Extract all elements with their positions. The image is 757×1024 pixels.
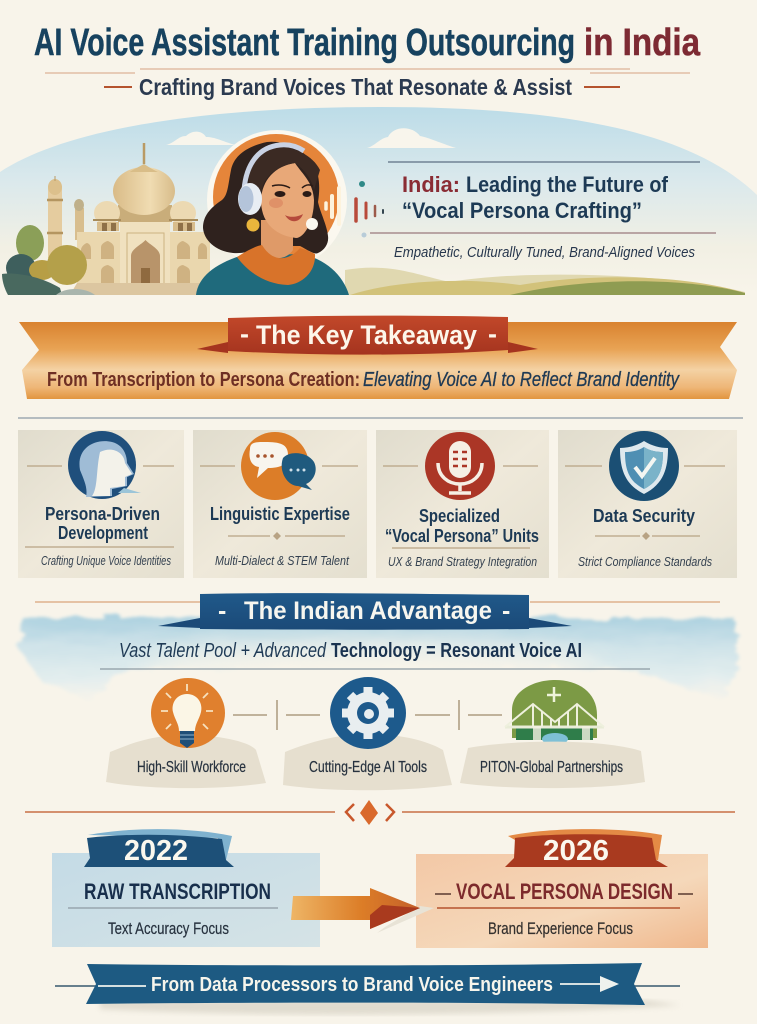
box heading: RAW TRANSCRIPTION: [84, 879, 271, 904]
panel: hero scene: [0, 107, 757, 295]
headset: [244, 145, 304, 190]
facial features: [269, 185, 313, 221]
arrow: 2022 to 2026: [291, 888, 434, 933]
heading: The Indian Advantage: [158, 593, 572, 630]
label: High-Skill Workforce: [137, 759, 246, 776]
icon: bridge: [505, 680, 604, 745]
panel: Persona-Driven Development: [18, 430, 184, 578]
clouds: [166, 128, 456, 148]
panel: key takeaway ribbon: [19, 316, 737, 399]
heading: The Key Takeaway: -: [240, 319, 249, 349]
heading: The Indian Advantage: -: [502, 597, 510, 625]
heading: The Key Takeaway: -: [488, 319, 497, 349]
label: PITON-Global Partnerships: [480, 759, 623, 776]
ribbon: 2022: 2022: [124, 835, 188, 867]
icon: chat bubbles: [241, 432, 316, 500]
icon: light bulb: [151, 678, 225, 748]
card title: Persona-Driven: [45, 504, 160, 524]
takeaway text: [47, 369, 680, 391]
earrings: [246, 218, 260, 232]
panel: Linguistic Expertise: [193, 430, 367, 578]
ribbon: 2026: 2026: [543, 835, 609, 867]
scarf: [237, 245, 315, 285]
panel: 2026 vocal persona design: [416, 829, 708, 948]
watercolor band: [20, 618, 738, 700]
panel: High-Skill Workforce: [106, 678, 266, 788]
hero text: [370, 162, 716, 261]
divider ornament: [25, 800, 735, 825]
icon: trees: [2, 225, 95, 295]
card caption: Multi-Dialect & STEM Talent: [215, 553, 350, 568]
hero text: Empathetic, Culturally Tuned, Brand-Aligned Voices: [394, 244, 695, 261]
box caption: Brand Experience Focus: [488, 919, 633, 938]
connectors: [233, 700, 502, 730]
subtitle: [45, 69, 690, 100]
hero text: India:: [402, 172, 460, 197]
card title: Development: [58, 523, 148, 543]
sound waves: [326, 188, 383, 224]
box heading: VOCAL PERSONA DESIGN: [456, 879, 673, 904]
body: [196, 254, 349, 295]
hero text: Leading the Future of: [466, 172, 669, 197]
takeaway text: From Transcription to Persona Creation:: [47, 369, 360, 391]
icon: shield: [609, 431, 679, 501]
icon: woman with headset: [196, 130, 383, 295]
ribbon: 2022: [84, 829, 234, 867]
panel: Specialized Vocal Persona Units: [376, 430, 549, 578]
title: in India: [584, 22, 701, 64]
title: AI Voice Assistant Training Outsourcing: [34, 22, 575, 64]
heading: The Indian Advantage: The Indian Advantage: [244, 597, 492, 625]
takeaway text: Elevating Voice AI to Reflect Brand Identity: [363, 369, 680, 391]
plaque: [106, 735, 266, 788]
heading: The Indian Advantage: -: [218, 597, 226, 625]
card title: [45, 504, 160, 543]
card caption: Strict Compliance Standards: [578, 554, 712, 569]
hero text: “Vocal Persona Crafting”: [402, 198, 642, 223]
equation text: Vast Talent Pool + Advanced: [119, 640, 327, 662]
ribbon: 2026: [505, 829, 668, 867]
panel: PITON-Global Partnerships: [460, 680, 645, 788]
heading: The Key Takeaway: The Key Takeaway: [256, 320, 477, 350]
heading: The Key Takeaway: [197, 316, 538, 355]
closing banner: [55, 963, 680, 1015]
hair back: [203, 142, 328, 253]
card title: Linguistic Expertise: [210, 504, 350, 524]
label: Cutting-Edge AI Tools: [309, 759, 427, 776]
card title: Data Security: [593, 506, 695, 526]
card caption: UX & Brand Strategy Integration: [388, 554, 537, 569]
neck and face: [261, 220, 293, 258]
sky: [0, 107, 757, 295]
panel: 2022 raw transcription: [52, 829, 320, 947]
plaque: [460, 742, 645, 788]
hills: [345, 268, 745, 295]
icon: gear: [330, 677, 406, 749]
panel: Data Security: [558, 430, 737, 578]
icon: head: [68, 431, 141, 499]
card title: Specialized: [419, 506, 500, 526]
closing banner: From Data Processors to Brand Voice Engineers: [151, 974, 553, 996]
icon: microphone: [425, 432, 495, 500]
fringe: [248, 147, 320, 195]
card caption: Crafting Unique Voice Identities: [41, 553, 171, 568]
card title: “Vocal Persona” Units: [385, 526, 539, 546]
equation text: Technology = Resonant Voice AI: [331, 640, 582, 662]
panel: Cutting-Edge AI Tools: [283, 677, 452, 790]
card title: [385, 506, 539, 546]
plaque: [283, 735, 452, 790]
equation text: [100, 640, 650, 669]
subtitle: Crafting Brand Voices That Resonate & Assist: [139, 74, 572, 100]
box caption: Text Accuracy Focus: [108, 919, 229, 938]
icon: Taj Mahal: [47, 143, 210, 295]
